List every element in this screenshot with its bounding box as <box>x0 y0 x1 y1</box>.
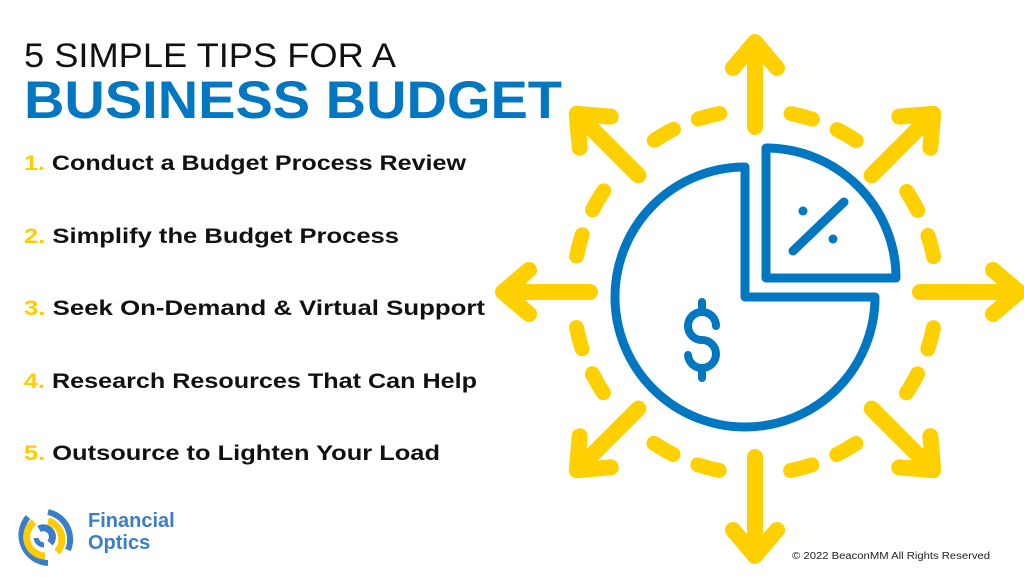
arrow up <box>733 42 777 127</box>
arrow down-left <box>561 393 654 486</box>
logo mark <box>21 512 70 563</box>
logo text: Financial <box>88 510 175 532</box>
tip 1: 1. Conduct a Budget Process Review <box>24 152 467 175</box>
copyright: © 2022 BeaconMM All Rights Reserved <box>792 551 990 562</box>
percent sign <box>793 202 844 251</box>
tip 4: 4. Research Resources That Can Help <box>24 370 477 393</box>
arrow up-left <box>561 98 654 191</box>
icon: arrows radiating <box>503 42 1019 556</box>
arrow down <box>733 457 777 556</box>
arrow up-right <box>856 98 949 191</box>
pie main body <box>615 167 875 427</box>
logo: Financial Optics: Optics <box>88 532 150 554</box>
pie slice <box>766 148 896 278</box>
title line 2: BUSINESS BUDGET <box>24 71 562 130</box>
tips list <box>24 152 485 465</box>
icon: dashed ring <box>573 110 937 474</box>
title line 1: 5 SIMPLE TIPS FOR A <box>24 37 396 75</box>
arrow down-right <box>856 393 949 486</box>
arrow right <box>920 270 1019 314</box>
tip 5: 5. Outsource to Lighten Your Load <box>24 442 440 465</box>
logo: Financial Optics <box>21 510 175 563</box>
arrow left <box>503 270 590 314</box>
icon: pie chart <box>615 148 896 427</box>
tip 3: 3. Seek On-Demand & Virtual Support <box>24 297 485 320</box>
tip 2: 2. Simplify the Budget Process <box>24 225 399 248</box>
dollar sign <box>688 302 716 378</box>
